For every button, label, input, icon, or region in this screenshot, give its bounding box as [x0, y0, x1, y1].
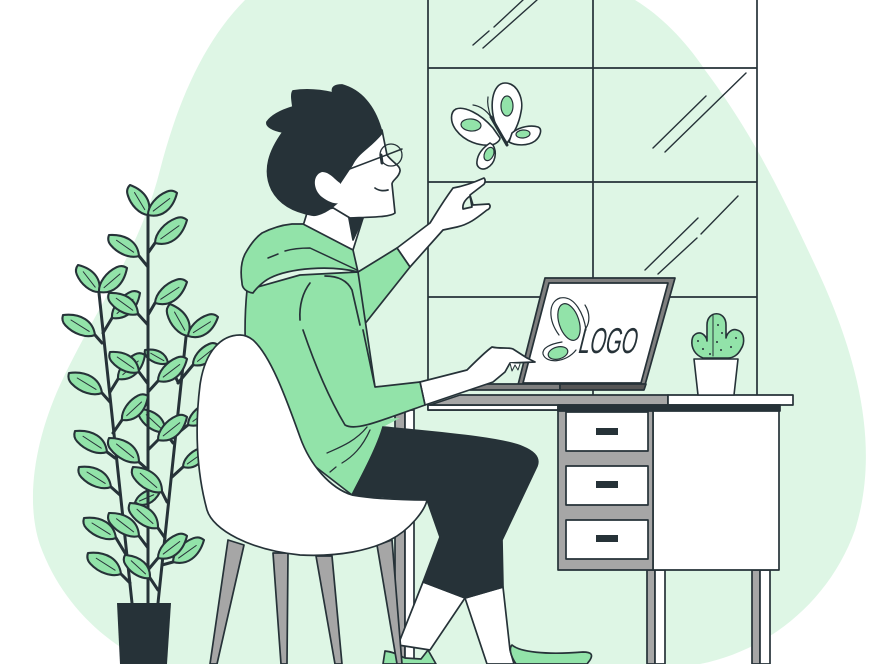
right shoe [510, 645, 592, 664]
wing spots [461, 96, 530, 162]
butterfly [452, 83, 541, 169]
dark strip [558, 405, 780, 411]
plant pot [117, 603, 171, 664]
drawer handles [596, 428, 618, 542]
raised sleeve [358, 248, 410, 330]
torso bottom cover [350, 418, 400, 493]
drawer 3 [566, 520, 648, 559]
torso to pants edge [352, 427, 383, 495]
back leaves [106, 287, 222, 508]
body and antennae [491, 117, 507, 145]
plant [58, 181, 222, 664]
cactus pot [694, 359, 738, 395]
stems [95, 213, 193, 603]
forearm sleeve [303, 330, 425, 427]
window reflections [473, 0, 746, 274]
raised arm [397, 178, 490, 267]
drawer 1 [566, 412, 648, 451]
chair legs [210, 540, 402, 664]
window [428, 0, 757, 410]
drawer column [558, 411, 653, 570]
chair [197, 335, 427, 664]
laptop screen [523, 283, 668, 383]
glasses [347, 144, 402, 170]
lower right wing [509, 126, 541, 145]
chair seat [197, 335, 427, 555]
right leg [465, 587, 514, 664]
hoodie creases [268, 248, 370, 472]
under chin shadow [348, 213, 363, 240]
pants [352, 427, 538, 598]
laptop lid [518, 278, 675, 385]
neck [303, 205, 363, 250]
upper right wing [492, 83, 522, 143]
lower arm [420, 347, 535, 405]
person [241, 85, 592, 664]
left leg [398, 582, 465, 650]
cabinet [653, 411, 779, 570]
desk sill [428, 405, 558, 410]
logo mark [543, 298, 589, 361]
cactus plant [692, 314, 744, 395]
laptop base [470, 384, 560, 390]
face [320, 130, 400, 218]
desk [395, 395, 793, 664]
logo text: LOGO [577, 320, 641, 361]
desk top [430, 395, 668, 405]
lower left wing [477, 143, 495, 169]
torso [245, 272, 383, 495]
hood [241, 224, 358, 293]
ear [315, 172, 340, 203]
smile [375, 188, 388, 191]
upper left wing [452, 108, 500, 145]
cactus [692, 314, 744, 358]
front leaves [58, 181, 222, 584]
hair [267, 85, 382, 215]
drawer 2 [566, 466, 648, 505]
desk legs [395, 410, 770, 664]
laptop [470, 278, 675, 390]
left shoe [383, 650, 436, 664]
